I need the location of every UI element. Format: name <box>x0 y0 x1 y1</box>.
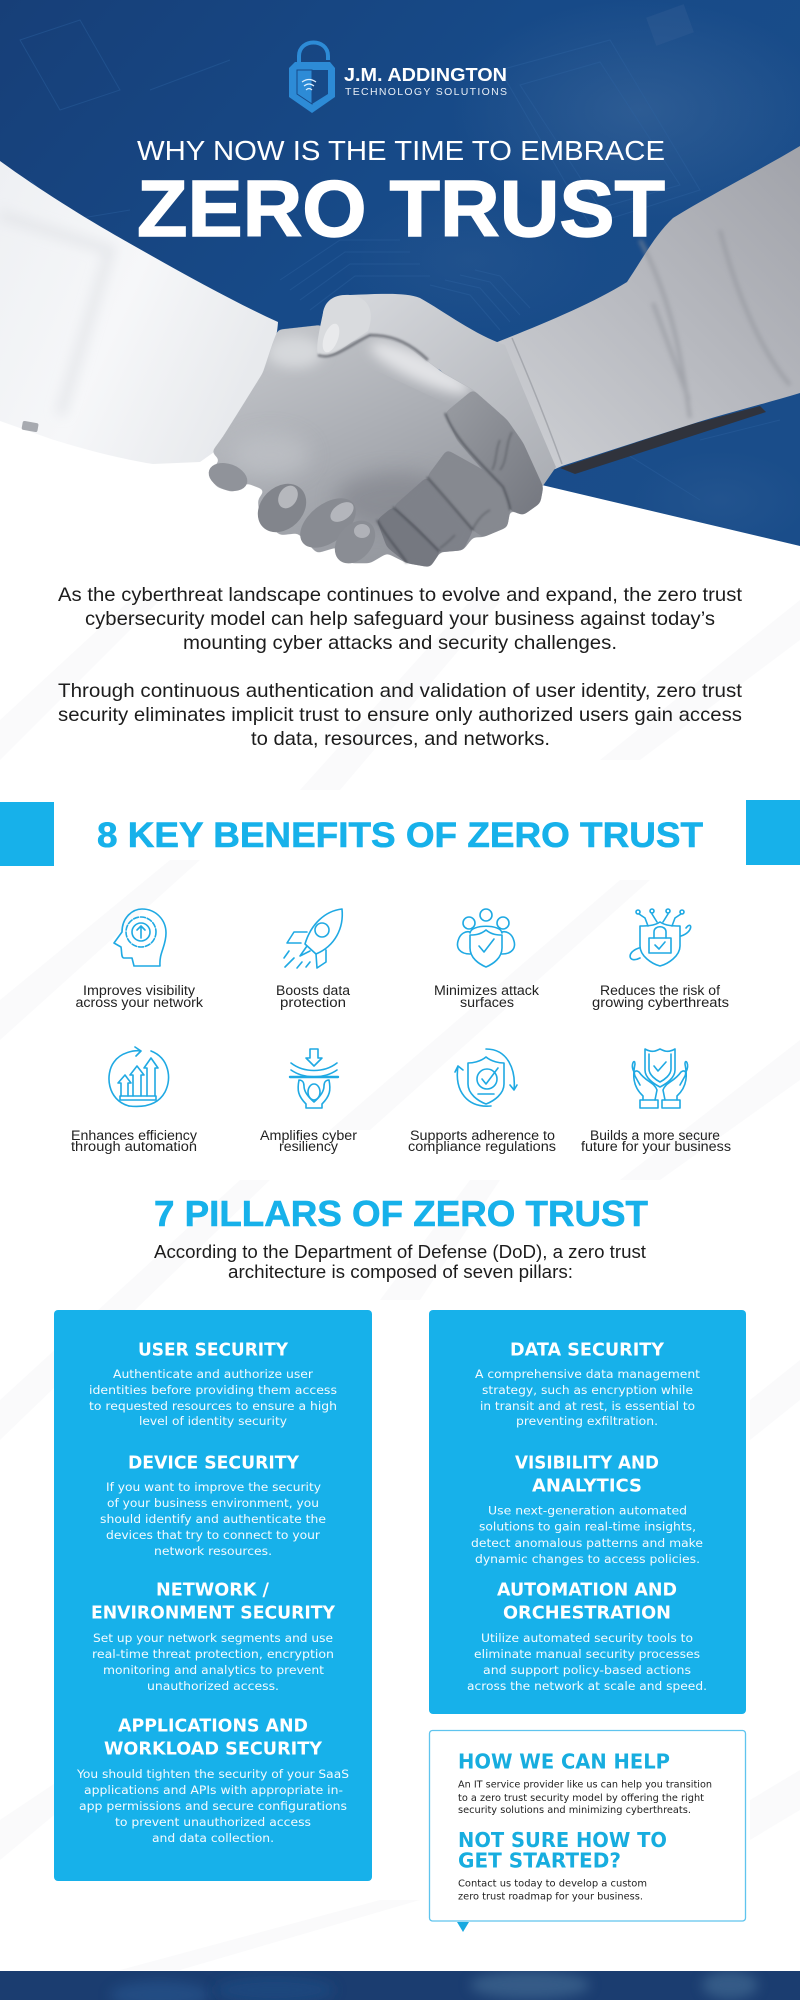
pillar: data security: preventing exfiltration. <box>516 1414 658 1428</box>
panel: right pillars <box>429 1310 746 1714</box>
how we can help text: security solutions and minimizing cyberthreats. <box>458 1805 691 1816</box>
icon: person resisting pressure <box>290 1049 338 1108</box>
left shirt sleeve <box>0 161 278 464</box>
not sure how to get started text: Contact us today to develop a custom <box>458 1878 647 1890</box>
label: Supports adherence to <box>410 1128 555 1143</box>
pillar: automation and orchestration: ORCHESTRATION <box>503 1604 671 1624</box>
benefits heading with side bars <box>0 800 800 866</box>
label: protection <box>280 995 346 1010</box>
pillar: device security: If you want to improve the security <box>106 1480 321 1494</box>
intro text: Through continuous authentication and validation of user identity, zero trust <box>58 680 743 702</box>
hero blue background with circuit texture <box>0 0 800 550</box>
label: compliance regulations <box>408 1139 556 1154</box>
pillar: device security: of your business environment, you <box>107 1496 319 1510</box>
company tagline: TECHNOLOGY SOLUTIONS <box>345 86 507 98</box>
pillar: user security: level of identity security <box>139 1414 287 1428</box>
icon: shield padlock <box>289 42 335 113</box>
pillar: user security: identities before providing them access <box>89 1383 337 1397</box>
pillar: network / environment security: monitoring and analytics to prevent <box>103 1663 324 1677</box>
label: future for your business <box>581 1139 731 1154</box>
pillar: visibility and analytics: dynamic changes to access policies. <box>475 1552 700 1566</box>
label: Enhances efficiency <box>71 1128 197 1143</box>
pillar: visibility and analytics: VISIBILITY AND <box>515 1454 659 1474</box>
how we can help text: An IT service provider like us can help you transition <box>458 1780 712 1790</box>
benefit 6 <box>260 1049 358 1154</box>
benefit 8 <box>581 1049 731 1154</box>
pillar: device security: should identify and authenticate the <box>100 1512 326 1526</box>
pillar: device security: network resources. <box>154 1544 272 1558</box>
benefit 3 <box>434 909 539 1010</box>
footer band <box>0 1971 800 2000</box>
intro text: cybersecurity model can help safeguard your business against today’s <box>85 608 715 630</box>
benefit 1 <box>76 909 203 1010</box>
pillar: applications and workload security <box>76 1716 349 1845</box>
pillar: visibility and analytics: solutions to gain real-time insights, <box>479 1520 696 1534</box>
pillar: automation and orchestration: across the network at scale and speed. <box>467 1679 707 1693</box>
handshake photo <box>0 146 800 571</box>
not sure how to get started text: GET STARTED? <box>458 1848 621 1872</box>
company name: J.M. ADDINGTON <box>344 65 507 85</box>
background diagonal streaks <box>0 590 800 1970</box>
label: growing cyberthreats <box>592 995 729 1010</box>
pillar: network / environment security: Set up your network segments and use <box>93 1631 333 1645</box>
icon: shield with lock and circuits <box>630 909 691 966</box>
how we can help text <box>458 1750 712 1816</box>
intro text: mounting cyber attacks and security challenges. <box>183 632 617 654</box>
left hand back <box>208 325 543 567</box>
icon: hands holding shield <box>632 1049 688 1108</box>
pillar: user security: Authenticate and authorize user <box>113 1367 313 1381</box>
pillar: data security: A comprehensive data management <box>475 1367 700 1381</box>
icon: rocket <box>284 909 342 968</box>
intro text: security eliminates implicit trust to ensure only authorized users gain access <box>58 704 742 726</box>
label: Builds a more secure <box>590 1128 720 1143</box>
label <box>76 983 203 1010</box>
benefit 2 <box>276 909 351 1010</box>
pillar: applications and workload security: and data collection. <box>152 1831 274 1845</box>
clasped fingertips <box>205 458 383 571</box>
title line 2: ZERO TRUST <box>137 164 665 253</box>
intro text <box>58 584 743 750</box>
pillar: data security: DATA SECURITY <box>510 1340 664 1360</box>
label: resiliency <box>279 1139 338 1154</box>
panel: left pillars <box>54 1310 372 1881</box>
pillar: device security <box>100 1454 326 1558</box>
label <box>581 1128 731 1154</box>
pillar: data security: strategy, such as encryption while <box>482 1383 693 1397</box>
logo <box>289 42 507 113</box>
not sure how to get started text <box>458 1828 667 1902</box>
pillars heading: 7 PILLARS OF ZERO TRUST <box>154 1193 648 1234</box>
pillar: visibility and analytics <box>471 1454 703 1566</box>
pillar: applications and workload security: applications and APIs with appropriate in- <box>84 1783 343 1797</box>
pillar: automation and orchestration <box>467 1580 707 1693</box>
title line 1: WHY NOW IS THE TIME TO EMBRACE <box>137 135 665 166</box>
right sleeve <box>480 146 800 474</box>
pillar: user security: to requested resources to ensure a high <box>89 1399 337 1413</box>
benefit 7 <box>408 1049 556 1154</box>
pillar: network / environment security <box>91 1580 335 1693</box>
callout pointer <box>457 1922 469 1932</box>
pillar: automation and orchestration: and support policy-based actions <box>483 1663 691 1677</box>
thumb <box>317 295 428 360</box>
pillar: data security <box>475 1340 700 1428</box>
pillar: automation and orchestration: eliminate manual security processes <box>474 1647 700 1661</box>
pillars intro text: architecture is composed of seven pillars: <box>228 1262 573 1282</box>
right hand and thumb base <box>318 294 556 490</box>
pillars intro text: According to the Department of Defense (DoD), a zero trust <box>154 1242 646 1262</box>
not sure how to get started text: zero trust roadmap for your business. <box>458 1892 643 1902</box>
knuckle fingers <box>377 390 543 567</box>
pillar: visibility and analytics: ANALYTICS <box>532 1476 642 1496</box>
title <box>137 135 665 253</box>
pillar: applications and workload security: APPLICATIONS AND <box>118 1716 308 1736</box>
how we can help text: to a zero trust security model by offering the right <box>458 1793 704 1804</box>
pillar: network / environment security: NETWORK / <box>156 1580 270 1600</box>
how we can help text: HOW WE CAN HELP <box>458 1750 670 1774</box>
pillar: device security: DEVICE SECURITY <box>128 1454 299 1474</box>
pillar: data security: in transit and at rest, is essential to <box>480 1399 695 1413</box>
label: Improves visibility <box>83 983 195 998</box>
benefit 5 <box>71 1047 197 1154</box>
label <box>276 983 351 1010</box>
panel: how we can help callout <box>430 1730 746 1932</box>
pillars intro text <box>154 1242 646 1282</box>
pillar: user security <box>89 1340 337 1428</box>
pillar: visibility and analytics: Use next-generation automated <box>488 1504 687 1518</box>
intro text: to data, resources, and networks. <box>251 728 550 750</box>
label <box>260 1128 358 1154</box>
icon: shield with circular arrows <box>455 1049 517 1106</box>
icon: rising arrows in circle <box>109 1047 168 1106</box>
benefits heading with side bars: 8 KEY BENEFITS OF ZERO TRUST <box>97 816 703 855</box>
benefit 4 <box>592 909 729 1010</box>
pillar: automation and orchestration: AUTOMATION AND <box>497 1580 677 1600</box>
pillar: visibility and analytics: detect anomalous patterns and make <box>471 1536 703 1550</box>
label <box>592 983 729 1010</box>
label: Boosts data <box>276 983 351 998</box>
pillar: network / environment security: real-time threat protection, encryption <box>92 1647 334 1661</box>
pillar: applications and workload security: to prevent unauthorized access <box>115 1815 311 1829</box>
pillar: network / environment security: unauthorized access. <box>147 1679 279 1693</box>
pillar: network / environment security: ENVIRONMENT SECURITY <box>91 1604 335 1624</box>
intro text: As the cyberthreat landscape continues to evolve and expand, the zero trust <box>58 584 743 606</box>
not sure how to get started text: NOT SURE HOW TO <box>458 1828 667 1852</box>
label: Reduces the risk of <box>600 983 720 998</box>
pillar: user security: USER SECURITY <box>138 1340 288 1360</box>
label: Minimizes attack <box>434 983 539 998</box>
label: across your network <box>76 995 203 1010</box>
icon: head with gear <box>114 909 166 966</box>
pillar: applications and workload security: WORKLOAD SECURITY <box>104 1740 322 1760</box>
pillar: applications and workload security: app permissions and secure configurations <box>79 1799 347 1813</box>
label <box>408 1128 556 1154</box>
pillar: applications and workload security: You should tighten the security of your SaaS <box>76 1767 349 1781</box>
pillar: device security: devices that try to connect to your <box>106 1528 320 1542</box>
icon: team with shield <box>458 909 514 967</box>
label: surfaces <box>460 995 514 1010</box>
label <box>434 983 539 1010</box>
label: Amplifies cyber <box>260 1128 358 1143</box>
pillar: automation and orchestration: Utilize automated security tools to <box>481 1631 693 1645</box>
label <box>71 1128 197 1154</box>
label: through automation <box>71 1139 197 1154</box>
